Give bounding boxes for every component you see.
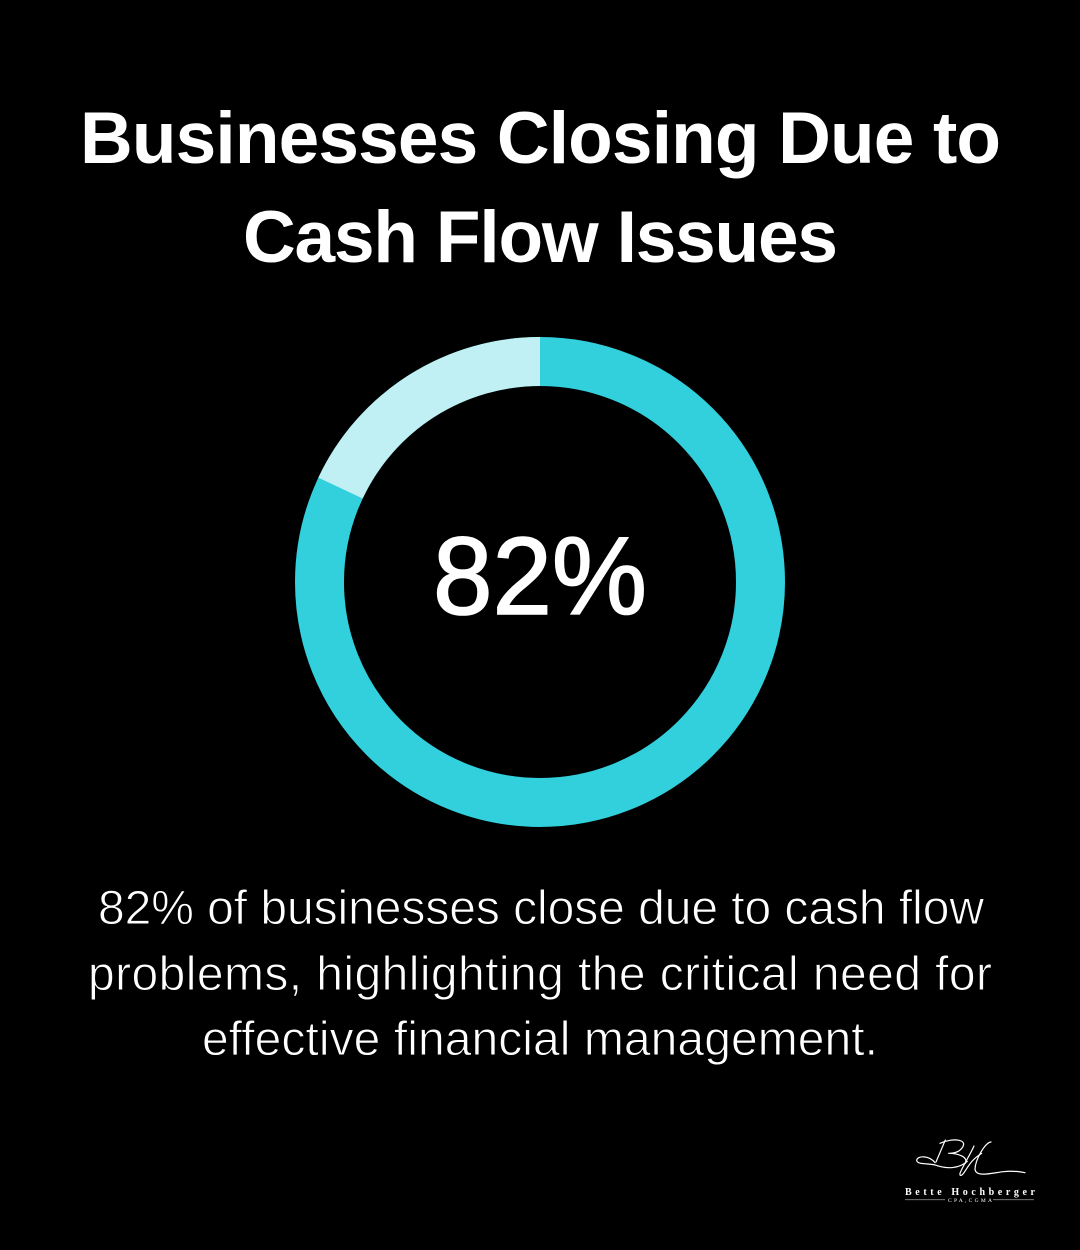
remaining 18% segment xyxy=(340,362,540,488)
description text: problems, highlighting the critical need for xyxy=(88,948,992,1001)
logo name: Bette Hochberger xyxy=(905,1187,1036,1198)
description text: 82% of businesses close due to cash flow xyxy=(98,882,984,935)
logo: Bette Hochberger xyxy=(905,1140,1036,1204)
logo credentials: CPA,CGMA xyxy=(948,1198,992,1204)
icon: signature monogram xyxy=(917,1140,1025,1175)
description text: effective financial management. xyxy=(202,1013,878,1066)
center value: 82% xyxy=(433,515,647,638)
title: Businesses Closing Due to xyxy=(80,98,1001,179)
title xyxy=(80,98,1001,278)
title: Cash Flow Issues xyxy=(243,197,838,278)
donut chart: 82% xyxy=(320,362,760,802)
description text xyxy=(88,882,992,1066)
